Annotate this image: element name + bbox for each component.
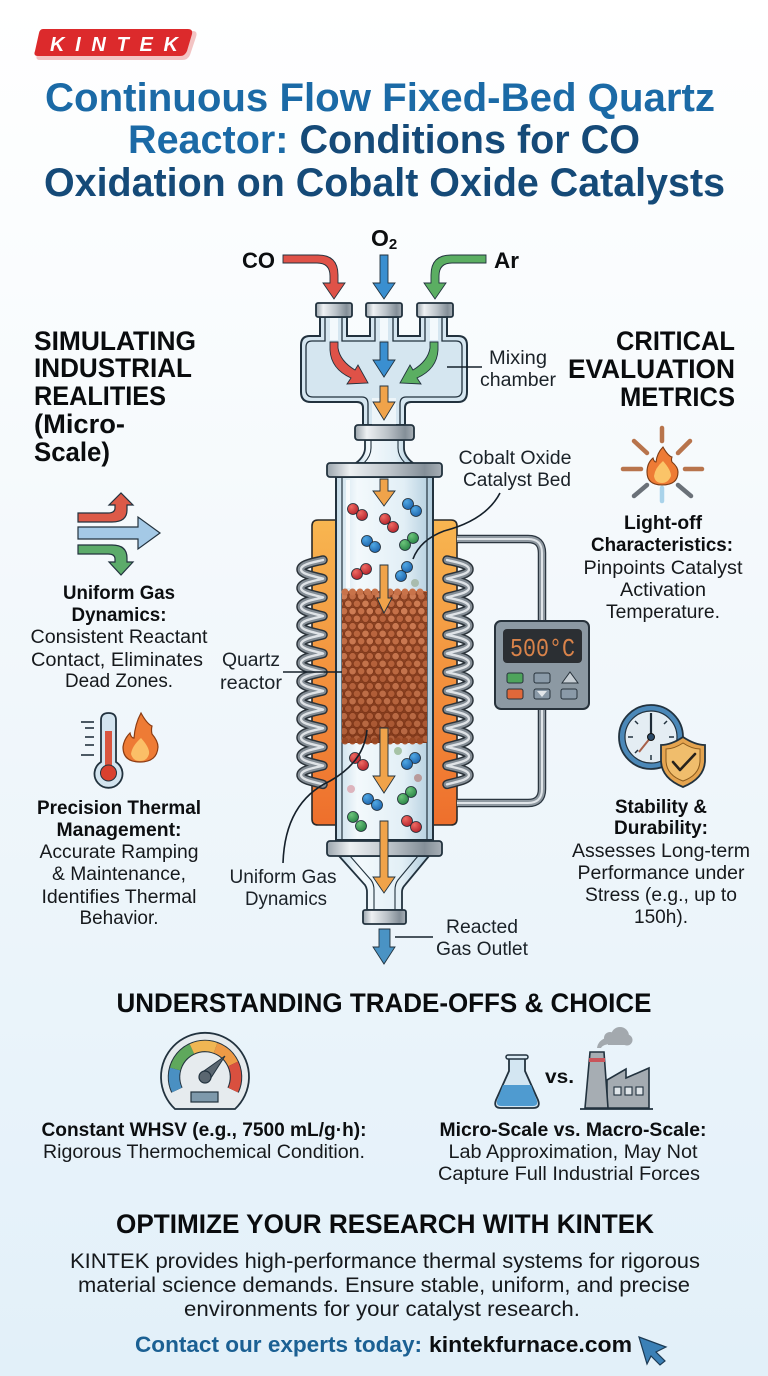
text: stability and durability: Stability & — [615, 797, 707, 818]
heading: critical evaluation metrics — [568, 326, 735, 412]
heading: simulating industrial realities: REALITIES — [34, 381, 166, 411]
text: precision thermal management: Precision Thermal — [37, 798, 201, 819]
heading: critical evaluation metrics: EVALUATION — [568, 354, 735, 384]
heading: simulating industrial realities: (Micro- — [34, 409, 125, 439]
label: cobalt oxide catalyst bed: Cobalt Oxide — [458, 448, 572, 469]
gas labels: CO — [242, 248, 275, 273]
controller wiring — [457, 539, 542, 803]
text: constant WHSV — [42, 1120, 366, 1163]
gas labels: 2 — [389, 236, 397, 253]
text: kintek paragraph — [70, 1250, 700, 1321]
text: stability and durability — [572, 797, 750, 928]
title: Oxidation on Cobalt Oxide Catalysts — [44, 161, 725, 205]
mixing arrow: blue — [373, 342, 395, 377]
text: micro-scale vs macro-scale — [438, 1120, 706, 1185]
mixing arrow: green — [400, 342, 438, 384]
heading: understanding trade-offs and choice: UNDERSTANDING TRADE-OFFS & CHOICE — [116, 988, 652, 1018]
icon: flask vs factory: vs. — [545, 1067, 574, 1088]
text: precision thermal management: & Maintenance, — [52, 864, 186, 885]
text: stability and durability: Stress (e.g., up to — [585, 885, 737, 906]
text: stability and durability: 150h). — [634, 907, 688, 928]
text: precision thermal management: Identifies Thermal — [42, 887, 196, 908]
gas labels — [242, 225, 519, 273]
label: cobalt oxide catalyst bed — [413, 448, 572, 559]
text: precision thermal management: Accurate Ramping — [40, 842, 198, 863]
contact line — [135, 1332, 632, 1357]
gas molecules lower — [347, 747, 422, 832]
label: reacted gas outlet — [395, 917, 529, 960]
logo: KINTEK — [34, 29, 197, 60]
title: Continuous Flow Fixed-Bed Quartz — [45, 76, 715, 120]
flow arrow: out of bed — [373, 728, 395, 793]
icon: cursor — [639, 1337, 666, 1365]
label: reacted gas outlet: Gas Outlet — [436, 939, 529, 960]
text: kintek paragraph: KINTEK provides high-performance thermal systems for rigorous — [70, 1250, 700, 1273]
temperature controller — [495, 621, 589, 709]
text: kintek paragraph: material science demands. Ensure stable, uniform, and precise — [78, 1274, 690, 1297]
label: cobalt oxide catalyst bed: Catalyst Bed — [463, 470, 571, 491]
label: quartz reactor: Quartz — [222, 650, 280, 671]
mixed gas arrow — [373, 386, 395, 420]
text: micro-scale vs macro-scale: Lab Approximation, May Not — [448, 1142, 698, 1163]
flow arrow: tube bottom — [373, 821, 395, 893]
label: mixing chamber: Mixing — [489, 348, 547, 369]
label: mixing chamber: chamber — [480, 370, 557, 391]
text: uniform gas dynamics — [30, 583, 208, 692]
icon: light-off flame with rays — [623, 428, 702, 501]
heading: simulating industrial realities — [34, 326, 196, 467]
mixing arrow: red — [330, 342, 368, 384]
label: reacted gas outlet: Reacted — [446, 917, 518, 938]
gas labels: O — [371, 225, 389, 251]
outlet funnel — [339, 856, 429, 910]
heading: optimize your research: OPTIMIZE YOUR RESEARCH WITH KINTEK — [116, 1209, 654, 1239]
text: light-off characteristics — [584, 513, 743, 623]
contact line: kintekfurnace.com — [429, 1332, 632, 1357]
contact line: Contact our experts today: — [135, 1332, 422, 1357]
text: stability and durability: Performance under — [578, 863, 745, 884]
text: light-off characteristics: Characteristics: — [591, 535, 733, 556]
top flange — [327, 463, 442, 477]
text: uniform gas dynamics: Contact, Eliminates — [31, 650, 203, 671]
text: constant WHSV: Constant WHSV (e.g., 7500 mL/g·h): — [42, 1120, 366, 1141]
label: uniform gas dynamics: Dynamics — [245, 889, 327, 910]
text: precision thermal management: Behavior. — [80, 908, 158, 929]
text: uniform gas dynamics: Dead Zones. — [65, 671, 173, 692]
heading: simulating industrial realities: SIMULATING — [34, 326, 196, 356]
text: micro-scale vs macro-scale: Micro-Scale vs. Macro-Scale: — [440, 1120, 706, 1141]
heading: critical evaluation metrics: CRITICAL — [616, 326, 735, 356]
label: quartz reactor — [220, 650, 342, 694]
heading: critical evaluation metrics: METRICS — [620, 382, 735, 412]
arrow: reacted gas outlet — [373, 929, 395, 964]
text: precision thermal management: Management: — [56, 820, 182, 841]
label: uniform gas dynamics: Uniform Gas — [230, 867, 336, 888]
heating coil left — [301, 560, 323, 784]
icon: thermometer and flame — [81, 713, 158, 788]
logo: KINTEK: KINTEK — [50, 34, 180, 56]
text: uniform gas dynamics: Dynamics: — [72, 605, 166, 626]
arrow: O2 inlet — [373, 255, 395, 299]
text: precision thermal management — [37, 798, 201, 929]
text: stability and durability: Durability: — [614, 818, 708, 839]
quartz reactor tube — [336, 477, 433, 840]
text: micro-scale vs macro-scale: Capture Full Industrial Forces — [438, 1164, 700, 1185]
text: uniform gas dynamics: Consistent Reactant — [30, 627, 208, 648]
text: light-off characteristics: Temperature. — [606, 602, 720, 623]
text: kintek paragraph: environments for your catalyst research. — [184, 1298, 580, 1321]
arrow: Ar inlet — [424, 255, 486, 299]
heating jacket — [312, 520, 457, 825]
upper neck — [356, 440, 413, 463]
text: uniform gas dynamics: Uniform Gas — [63, 583, 175, 604]
text: light-off characteristics: Activation — [620, 580, 706, 601]
title: Reactor: Conditions for CO — [128, 118, 640, 162]
bottom flange — [327, 841, 442, 856]
gas molecules upper — [348, 498, 422, 587]
catalyst bed — [342, 591, 427, 743]
text: light-off characteristics: Pinpoints Catalyst — [584, 558, 743, 579]
heading: simulating industrial realities: INDUSTRIAL — [34, 353, 192, 383]
arrow: CO inlet — [283, 255, 345, 299]
label: uniform gas dynamics — [230, 730, 367, 910]
mixing manifold — [301, 317, 467, 425]
icon: flask vs factory — [495, 1027, 653, 1109]
icon: clock and shield — [619, 705, 705, 787]
icon: WHSV gauge — [161, 1033, 249, 1109]
heading: simulating industrial realities: Scale) — [34, 437, 110, 467]
inlet flanges — [316, 303, 453, 317]
outlet flange — [363, 910, 406, 924]
title — [44, 76, 725, 205]
temperature controller: 500°C — [510, 634, 575, 664]
text: stability and durability: Assesses Long-term — [572, 841, 750, 862]
text: constant WHSV: Rigorous Thermochemical Condition. — [43, 1142, 365, 1163]
heating coil right — [447, 560, 469, 784]
flow arrow: into bed — [377, 565, 392, 613]
text: light-off characteristics: Light-off — [624, 513, 703, 534]
flow arrow: tube top — [373, 479, 395, 506]
label: mixing chamber — [447, 348, 557, 391]
label: quartz reactor: reactor — [220, 673, 283, 694]
gas labels: Ar — [494, 248, 519, 273]
icon: uniform gas flow arrows — [78, 493, 160, 575]
neck flange — [355, 425, 414, 440]
